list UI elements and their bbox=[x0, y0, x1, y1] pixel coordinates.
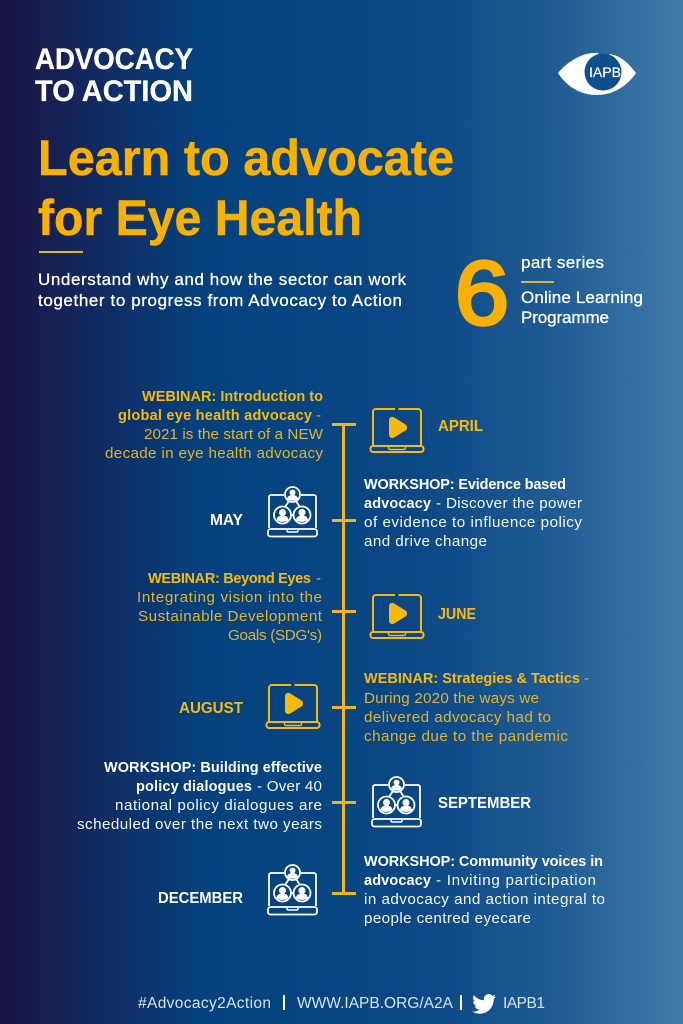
footer: IAPB1 bbox=[503, 995, 545, 1012]
icon: September workshop laptop bbox=[372, 777, 421, 826]
April webinar text: decade in eye health advocacy bbox=[105, 445, 323, 462]
big number 6: 6 bbox=[455, 244, 509, 344]
series title: ADVOCACY bbox=[35, 43, 193, 76]
main heading bbox=[38, 130, 454, 246]
December workshop text: - Inviting participation bbox=[436, 872, 596, 889]
icon: twitter bird bbox=[472, 994, 496, 1014]
May workshop text: - Discover the power bbox=[436, 495, 582, 512]
December workshop text: people centred eyecare bbox=[364, 910, 531, 927]
June webinar text: WEBINAR: Beyond Eyes bbox=[148, 571, 311, 587]
icon: August play laptop bbox=[266, 685, 320, 728]
December workshop text: WORKSHOP: Community voices in bbox=[364, 854, 603, 870]
June webinar text: - bbox=[316, 570, 321, 587]
April webinar text: - bbox=[316, 407, 321, 424]
December workshop text bbox=[364, 854, 605, 927]
April label: APRIL bbox=[438, 418, 483, 435]
September workshop text: WORKSHOP: Building effective bbox=[104, 760, 322, 776]
September workshop text: scheduled over the next two years bbox=[77, 816, 322, 833]
series title bbox=[35, 43, 193, 108]
icon: April play laptop bbox=[370, 409, 424, 452]
August webinar text bbox=[364, 670, 589, 745]
August webinar text: During 2020 the ways we bbox=[364, 690, 539, 707]
September workshop text: policy dialogues bbox=[136, 779, 252, 795]
June webinar text bbox=[137, 570, 323, 644]
footer: #Advocacy2Action bbox=[138, 995, 271, 1012]
September workshop text: - Over 40 bbox=[257, 778, 322, 795]
June webinar text: Sustainable Development bbox=[138, 608, 323, 625]
series note: Programme bbox=[521, 308, 609, 327]
September label: SEPTEMBER bbox=[438, 795, 531, 812]
icon: IAPB eye logo: IAPB bbox=[589, 64, 621, 80]
May workshop text: of evidence to influence policy bbox=[364, 514, 582, 531]
August webinar text: delivered advocacy had to bbox=[364, 709, 551, 726]
June label: JUNE bbox=[438, 606, 476, 623]
heading rule bbox=[39, 251, 83, 253]
December workshop text: in advocacy and action integral to bbox=[364, 891, 605, 908]
footer: WWW.IAPB.ORG/A2A bbox=[297, 995, 454, 1012]
April webinar text: WEBINAR: Introduction to bbox=[142, 389, 323, 405]
footer bbox=[138, 994, 545, 1014]
September workshop text bbox=[77, 760, 322, 833]
icon: IAPB eye logo bbox=[558, 53, 636, 95]
series title: TO ACTION bbox=[35, 75, 193, 108]
June webinar text: Goals (SDG's) bbox=[228, 627, 322, 644]
May workshop text: advocacy bbox=[364, 496, 431, 512]
series note: part series bbox=[521, 253, 604, 272]
intro text: Understand why and how the sector can work bbox=[38, 270, 406, 289]
icon: June play laptop bbox=[370, 595, 424, 638]
main heading: for Eye Health bbox=[38, 190, 362, 246]
icon: December workshop laptop bbox=[268, 865, 317, 914]
intro text bbox=[38, 270, 406, 310]
icon: May workshop laptop bbox=[268, 487, 317, 536]
December workshop text: advocacy bbox=[364, 873, 431, 889]
timeline bbox=[332, 423, 356, 895]
May label: MAY bbox=[210, 512, 243, 529]
April webinar text: 2021 is the start of a NEW bbox=[144, 426, 324, 443]
June webinar text: Integrating vision into the bbox=[137, 589, 322, 606]
series note: Online Learning bbox=[521, 288, 643, 307]
main heading: Learn to advocate bbox=[38, 130, 454, 186]
April webinar text: global eye health advocacy bbox=[118, 408, 312, 424]
May workshop text: and drive change bbox=[364, 533, 487, 550]
August webinar text: change due to the pandemic bbox=[364, 728, 568, 745]
August webinar text: WEBINAR: Strategies & Tactics bbox=[364, 671, 580, 687]
April webinar text bbox=[105, 389, 324, 462]
August label: AUGUST bbox=[179, 700, 243, 717]
August webinar text: - bbox=[584, 670, 589, 687]
intro text: together to progress from Advocacy to Action bbox=[38, 291, 402, 310]
May workshop text bbox=[364, 477, 582, 550]
series note bbox=[521, 253, 643, 327]
September workshop text: national policy dialogues are bbox=[115, 797, 322, 814]
May workshop text: WORKSHOP: Evidence based bbox=[364, 477, 566, 493]
December label: DECEMBER bbox=[158, 890, 243, 907]
